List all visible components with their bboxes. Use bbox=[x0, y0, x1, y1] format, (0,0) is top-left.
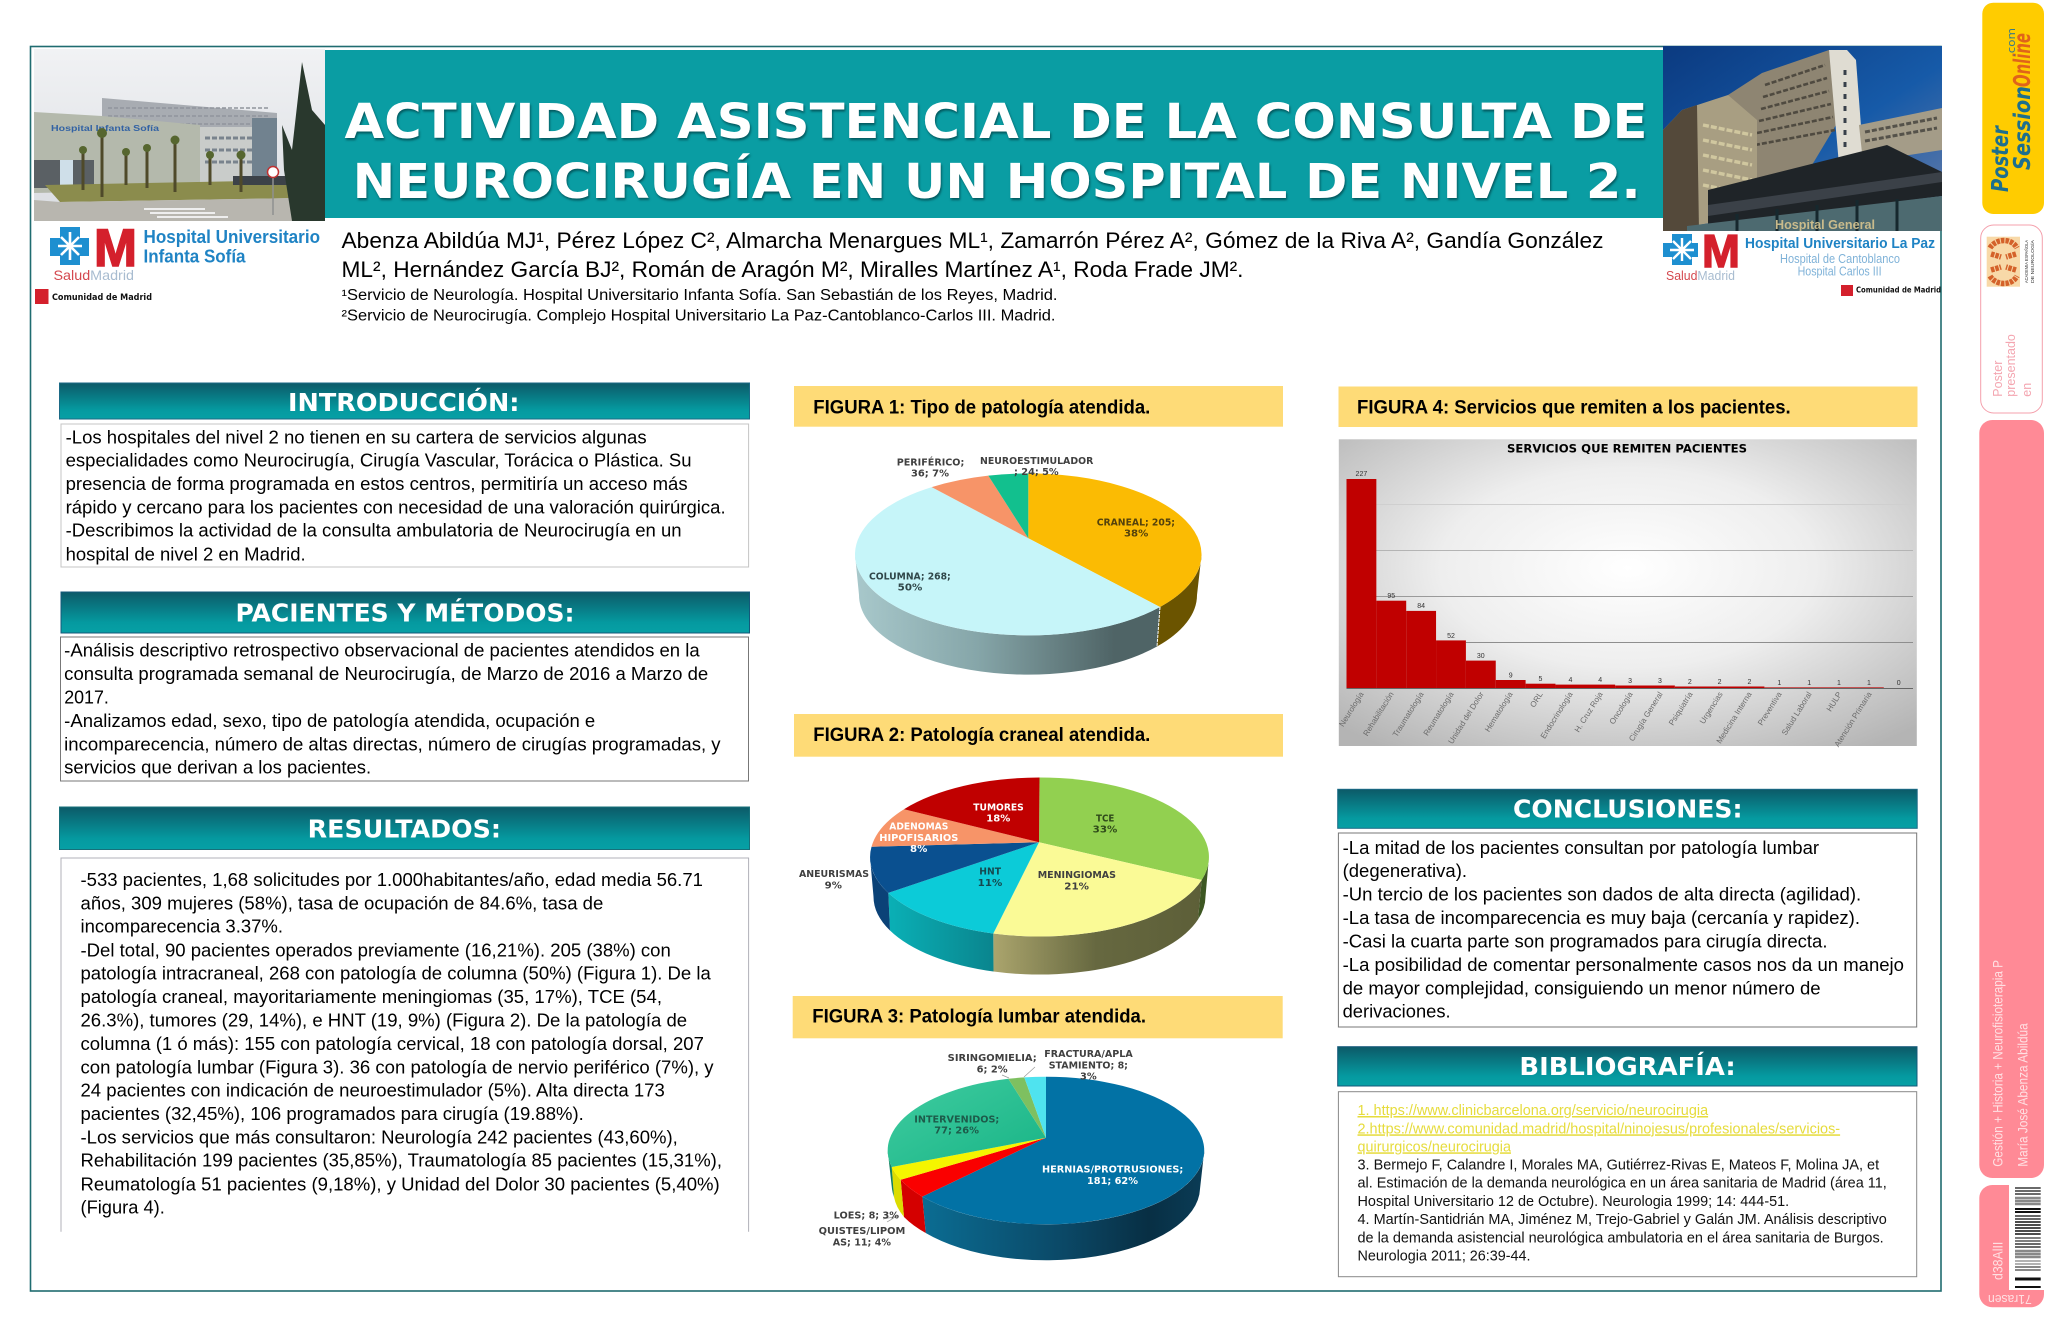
photo: Hospital Universitario La Paz: Hospital General bbox=[1775, 217, 1875, 232]
heading: conclusiones: CONCLUSIONES: bbox=[1513, 795, 1742, 824]
panel: resultados bbox=[60, 807, 750, 1232]
text block: introducción: presencia de forma programada en estos centros, permitiría un acceso más bbox=[66, 474, 688, 494]
pie chart: patología craneal: TCE bbox=[1096, 814, 1114, 825]
pie chart: patología lumbar: 77; 26% bbox=[934, 1126, 979, 1137]
pie chart: patología lumbar: LOES; 8; 3% bbox=[834, 1210, 899, 1221]
pie chart: patología lumbar: STAMIENTO; 8; bbox=[1049, 1060, 1128, 1071]
sidebar: poster presentado en bbox=[1981, 225, 2042, 413]
sidebar: PosterSessionOnline brand tab: Online bbox=[2010, 33, 2036, 87]
text block: conclusiones: (degenerativa). bbox=[1343, 861, 1467, 881]
pie chart: patología lumbar: 3% bbox=[1080, 1071, 1097, 1082]
authors and affiliations: Abenza Abildúa MJ¹, Pérez López C², Almarcha Menargues ML¹, Zamarrón Pérez A², Gómez de la Riva A², Gandía González bbox=[342, 228, 1604, 253]
photo: Hospital Infanta Sofía: Hospital Infanta Sofía bbox=[51, 123, 159, 133]
heading: pacientes y métodos bbox=[61, 592, 750, 633]
pie chart: tipo de patología: 50% bbox=[898, 583, 923, 594]
authors and affiliations: ML², Hernández García BJ², Román de Aragón M², Miralles Martínez A¹, Roda Frade JM². bbox=[342, 257, 1244, 282]
text block: resultados: patología intracraneal, 268 con patología de columna (50%) (Figura 1). De la bbox=[80, 964, 712, 984]
text block: bibliografía: 2.https://www.comunidad.madrid/hospital/ninojesus/profesionales/servicios- bbox=[1358, 1120, 1840, 1137]
sidebar: barcode tab: 71rasen bbox=[1988, 1292, 2032, 1307]
icon: brain logo: ACADEMIA ESPAÑOLA bbox=[2023, 240, 2029, 283]
icon: brain logo: DE NEUROLOGÍA bbox=[2029, 240, 2035, 283]
sidebar: pink tab with session and author: Gestión + Historia + Neurofisioterapia P bbox=[1990, 960, 2006, 1167]
bar chart: servicios que remiten pacientes: Salud Laboral bbox=[1780, 690, 1814, 737]
heading: figura 1: FIGURA 1: Tipo de patología atendida. bbox=[813, 397, 1150, 418]
logo: Hospital Universitario La Paz: Hospital de Cantoblanco bbox=[1780, 252, 1900, 266]
heading: conclusiones bbox=[1338, 789, 1917, 828]
bar chart: servicios que remiten pacientes: 3 bbox=[1658, 678, 1662, 685]
text block: resultados: pacientes (32,45%), 106 programados para cirugía (19.88%). bbox=[80, 1104, 584, 1124]
bar chart: servicios que remiten pacientes: 227 bbox=[1356, 471, 1367, 478]
pie chart: patología lumbar: QUISTES/LIPOM bbox=[819, 1226, 905, 1237]
bar chart: servicios que remiten pacientes: 2 bbox=[1748, 679, 1752, 686]
panel: figura 1 bbox=[794, 386, 1283, 675]
bar chart: servicios que remiten pacientes: 9 bbox=[1509, 672, 1513, 680]
text block: pacientes y métodos: servicios que derivan a los pacientes. bbox=[64, 758, 371, 778]
sidebar: pink tab with session and author: María José Abenza Abildúa bbox=[2014, 1023, 2030, 1167]
pie chart: tipo de patología: PERIFÉRICO; bbox=[897, 455, 964, 468]
pie chart: patología craneal: 18% bbox=[986, 814, 1011, 825]
pie chart: patología craneal: 11% bbox=[978, 878, 1003, 889]
bar chart: servicios que remiten pacientes: 95 bbox=[1387, 593, 1395, 600]
text block: resultados: -533 pacientes, 1,68 solicitudes por 1.000habitantes/año, edad media 56.71 bbox=[80, 870, 703, 890]
text block: resultados: Reumatología 51 pacientes (9,18%), y Unidad del Dolor 30 pacientes (5,40%) bbox=[80, 1174, 720, 1194]
pie chart: patología craneal: 8% bbox=[910, 844, 928, 855]
logo: Hospital Universitario Infanta Sofía: Hospital Universitario bbox=[144, 227, 320, 247]
text block: pacientes y métodos: 2017. bbox=[64, 687, 109, 707]
panel: introducción bbox=[60, 383, 750, 567]
logo: Hospital Universitario La Paz: Comunidad de Madrid bbox=[1856, 286, 1941, 295]
bar chart: servicios que remiten pacientes: SERVICIOS QUE REMITEN PACIENTES bbox=[1507, 442, 1747, 456]
pie chart: patología craneal: ADENOMAS bbox=[889, 822, 948, 833]
bar chart: servicios que remiten pacientes: 52 bbox=[1447, 633, 1455, 640]
sidebar: poster presentado en: presentado bbox=[2004, 334, 2018, 397]
sidebar: barcode tab: d38AlII bbox=[1990, 1242, 2006, 1280]
logo: Hospital Universitario Infanta Sofía: SaludMadrid bbox=[54, 267, 134, 283]
heading: pacientes y métodos: PACIENTES Y MÉTODOS: bbox=[236, 599, 574, 628]
text block: pacientes y métodos: -Análisis descriptivo retrospectivo observacional de pacientes atendidos en la bbox=[64, 641, 701, 661]
text block: introducción: hospital de nivel 2 en Madrid. bbox=[66, 544, 306, 564]
pie chart: tipo de patología: 36; 7% bbox=[911, 469, 949, 480]
text block: resultados: incomparecencia 3.37%. bbox=[80, 917, 283, 937]
text block: resultados: columna (1 ó más): 155 con patología cervical, 18 con patología dorsal, 207 bbox=[80, 1034, 704, 1054]
text block: introducción: -Describimos la actividad de la consulta ambulatoria de Neurocirugía en un bbox=[66, 521, 682, 541]
bar chart: servicios que remiten pacientes: Oncología bbox=[1608, 690, 1635, 726]
sidebar: PosterSessionOnline brand tab: Poster bbox=[1988, 125, 2014, 192]
text block: conclusiones: -La posibilidad de comentar personalmente casos nos da un manejo bbox=[1343, 955, 1904, 975]
text block: bibliografía: quirurgicos/neurocirugia bbox=[1358, 1138, 1512, 1155]
pie chart: patología craneal: MENINGIOMAS bbox=[1038, 870, 1116, 881]
heading: figura 2 bbox=[794, 714, 1283, 757]
text block: bibliografía: de la demanda asistencial neurológica ambulatoria en el área sanitaria de Burgos. bbox=[1358, 1229, 1884, 1246]
bar chart: servicios que remiten pacientes: Endocrinología bbox=[1539, 690, 1575, 740]
icon: blue star cross bbox=[50, 227, 89, 265]
pie chart: patología craneal: HIPOFISARIOS bbox=[879, 833, 958, 844]
pie chart: patología craneal bbox=[799, 777, 1209, 975]
text block: introducción bbox=[61, 424, 749, 567]
pie chart: tipo de patología bbox=[855, 455, 1202, 675]
pie chart: patología lumbar: 181; 62% bbox=[1087, 1176, 1138, 1187]
bar chart: servicios que remiten pacientes: 1 bbox=[1807, 680, 1811, 687]
sidebar: PosterSessionOnline brand tab: Session bbox=[2010, 86, 2036, 170]
text block: resultados: Rehabilitación 199 pacientes (35,85%), Traumatología 85 pacientes (15,31%), bbox=[80, 1151, 722, 1171]
text block: resultados: -Los servicios que más consultaron: Neurología 242 pacientes (43,60%), bbox=[80, 1127, 678, 1147]
text block: bibliografía bbox=[1338, 1092, 1917, 1277]
text block: resultados: patología craneal, mayoritariamente meningiomas (35, 17%), TCE (54, bbox=[80, 987, 662, 1007]
title banner: ACTIVIDAD ASISTENCIAL DE LA CONSULTA DE bbox=[344, 94, 1648, 150]
title banner bbox=[325, 50, 1663, 218]
panel: figura 4 bbox=[1337, 386, 1918, 749]
pie chart: patología lumbar: FRACTURA/APLA bbox=[1044, 1049, 1133, 1060]
bar chart: servicios que remiten pacientes: Medicina Interna bbox=[1715, 690, 1754, 745]
text block: conclusiones: -Un tercio de los pacientes son dados de alta directa (agilidad). bbox=[1343, 884, 1861, 904]
bar chart: servicios que remiten pacientes: 1 bbox=[1777, 680, 1781, 687]
text block: bibliografía: 3. Bermejo F, Calandre I, Morales MA, Gutiérrez-Rivas E, Mateos F, Molina JA, et bbox=[1358, 1157, 1880, 1174]
title banner: NEUROCIRUGÍA EN UN HOSPITAL DE NIVEL 2. bbox=[353, 153, 1641, 210]
text block: bibliografía: Neurologia 2011; 26:39-44. bbox=[1358, 1248, 1530, 1265]
panel: pacientes y métodos bbox=[60, 592, 750, 781]
text block: resultados: años, 309 mujeres (58%), tasa de ocupación de 84.6%, tasa de bbox=[80, 893, 603, 913]
bar chart: servicios que remiten pacientes: 2 bbox=[1688, 679, 1692, 686]
heading: introducción bbox=[60, 383, 750, 419]
pie chart: tipo de patología: COLUMNA; 268; bbox=[869, 571, 951, 582]
bar chart: servicios que remiten pacientes: 84 bbox=[1417, 603, 1425, 610]
pie chart: patología lumbar: SIRINGOMIELIA; bbox=[948, 1053, 1037, 1064]
pie chart: tipo de patología: CRANEAL; 205; bbox=[1097, 517, 1175, 528]
heading: introducción: INTRODUCCIÓN: bbox=[288, 387, 520, 417]
bar chart: servicios que remiten pacientes: 0 bbox=[1897, 680, 1901, 687]
logo: Hospital Universitario La Paz bbox=[1663, 225, 1941, 296]
authors and affiliations: ²Servicio de Neurocirugía. Complejo Hospital Universitario La Paz-Cantoblanco-Carlos III. Madrid. bbox=[342, 308, 1056, 324]
text block: conclusiones bbox=[1338, 833, 1917, 1027]
pie chart: patología craneal: ANEURISMAS bbox=[799, 869, 869, 880]
sidebar: barcode tab bbox=[1979, 1184, 2044, 1307]
heading: figura 3: FIGURA 3: Patología lumbar atendida. bbox=[812, 1006, 1146, 1027]
pie chart: patología craneal: TUMORES bbox=[973, 803, 1024, 814]
logo: Hospital Universitario La Paz: Hospital Universitario La Paz bbox=[1745, 235, 1935, 252]
heading: figura 1 bbox=[794, 386, 1283, 427]
sidebar: poster presentado en: en bbox=[2020, 383, 2034, 397]
pie chart: tipo de patología: 38% bbox=[1124, 529, 1149, 540]
text block: introducción: rápido y cercano para los pacientes con necesidad de una valoración quirúrgica. bbox=[66, 497, 726, 517]
pie chart: patología craneal: 9% bbox=[825, 880, 842, 891]
bar chart: servicios que remiten pacientes: 5 bbox=[1539, 676, 1543, 683]
pie chart: tipo de patología: ; 24; 5% bbox=[1014, 467, 1059, 478]
logo: Hospital Universitario Infanta Sofía bbox=[35, 219, 320, 304]
text block: conclusiones: -La tasa de incomparecencia es muy baja (cercanía y rapidez). bbox=[1343, 908, 1860, 928]
bar chart: servicios que remiten pacientes: 1 bbox=[1837, 680, 1841, 687]
bar chart: servicios que remiten pacientes: 1 bbox=[1867, 680, 1871, 687]
bar chart: servicios que remiten pacientes: Unidad del Dolor bbox=[1446, 690, 1486, 746]
icon: blue star cross bbox=[1663, 234, 1698, 265]
pie chart: tipo de patología: NEUROESTIMULADOR bbox=[980, 456, 1094, 467]
text block: introducción: especialidades como Neurocirugía, Cirugía Vascular, Torácica o Plástica. Su bbox=[66, 451, 692, 471]
text block: conclusiones: -La mitad de los pacientes consultan por patología lumbar bbox=[1343, 838, 1819, 858]
bar chart: servicios que remiten pacientes: 4 bbox=[1568, 677, 1572, 684]
text block: bibliografía: Hospital Universitario 12 de Octubre). Neurologia 1999; 14: 444-51. bbox=[1358, 1193, 1789, 1210]
bar chart: servicios que remiten pacientes: Urgencias bbox=[1698, 690, 1725, 726]
authors and affiliations bbox=[342, 228, 1604, 324]
bar chart: servicios que remiten pacientes: 30 bbox=[1477, 653, 1485, 660]
text block: pacientes y métodos: consulta programada semanal de Neurocirugía, de Marzo de 2016 a Marzo de bbox=[64, 664, 708, 684]
text block: resultados: con patología lumbar (Figura 3). 36 con patología de nervio periférico (7%), y bbox=[80, 1057, 714, 1077]
pie chart: patología lumbar: 6; 2% bbox=[977, 1064, 1008, 1075]
logo: Hospital Universitario La Paz: M bbox=[1702, 225, 1740, 277]
heading: figura 2: FIGURA 2: Patología craneal atendida. bbox=[813, 725, 1150, 746]
bar chart: servicios que remiten pacientes: 2 bbox=[1718, 679, 1722, 686]
bar chart: servicios que remiten pacientes: Cirugía General bbox=[1627, 690, 1665, 743]
text block: conclusiones: de mayor complejidad, consiguiendo un menor número de bbox=[1343, 978, 1821, 998]
bar chart: servicios que remiten pacientes: HULP bbox=[1825, 690, 1844, 713]
sidebar: pink tab with session and author bbox=[1979, 420, 2044, 1178]
heading: bibliografía: BIBLIOGRAFÍA: bbox=[1519, 1052, 1736, 1081]
bar chart: servicios que remiten pacientes: H. Cruz Roja bbox=[1573, 690, 1605, 734]
bar chart: servicios que remiten pacientes: Neurología bbox=[1337, 690, 1366, 728]
logo: Hospital Universitario La Paz: SaludMadrid bbox=[1666, 269, 1735, 283]
bar chart: servicios que remiten pacientes: 4 bbox=[1598, 677, 1602, 684]
text block: introducción: -Los hospitales del nivel 2 no tienen en su cartera de servicios algunas bbox=[66, 427, 647, 447]
heading: figura 4 bbox=[1338, 386, 1918, 427]
pie chart: patología lumbar bbox=[819, 1049, 1204, 1260]
panel: conclusiones bbox=[1338, 789, 1917, 1027]
text block: resultados: 26.3%), tumores (29, 14%), e HNT (19, 9%) (Figura 2). De la patología de bbox=[80, 1010, 687, 1030]
text block: bibliografía: 1. https://www.clinicbarcelona.org/servicio/neurocirugia bbox=[1358, 1102, 1709, 1119]
bar chart: servicios que remiten pacientes: Psiquiatría bbox=[1667, 690, 1695, 727]
bar chart: servicios que remiten pacientes: 3 bbox=[1628, 678, 1632, 685]
sidebar: poster presentado en: Poster bbox=[1991, 361, 2005, 397]
text block: bibliografía: 4. Martín-Santidrián MA, Jiménez M, Trejo-Gabriel y Galán JM. Análisis descriptivo bbox=[1358, 1211, 1887, 1228]
text block: resultados: (Figura 4). bbox=[80, 1198, 165, 1218]
bar chart: servicios que remiten pacientes: ORL bbox=[1528, 690, 1545, 709]
authors and affiliations: ¹Servicio de Neurología. Hospital Universitario Infanta Sofía. San Sebastián de los Reyes, Madrid. bbox=[342, 287, 1058, 304]
logo: Hospital Universitario Infanta Sofía: Infanta Sofía bbox=[144, 246, 246, 266]
sidebar: PosterSessionOnline brand tab bbox=[1982, 3, 2044, 214]
panel: figura 3 bbox=[793, 996, 1283, 1260]
bar chart: servicios que remiten pacientes: Reumatología bbox=[1422, 690, 1456, 737]
logo: Hospital Universitario Infanta Sofía: Comunidad de Madrid bbox=[52, 293, 152, 303]
pie chart: patología lumbar: AS; 11; 4% bbox=[833, 1237, 891, 1248]
text block: pacientes y métodos: -Analizamos edad, sexo, tipo de patología atendida, ocupación e bbox=[64, 711, 595, 731]
photo: Hospital Infanta Sofía bbox=[34, 49, 325, 221]
text block: resultados bbox=[61, 858, 749, 1232]
sidebar: PosterSessionOnline brand tab: .com bbox=[2005, 28, 2018, 57]
bar chart: servicios que remiten pacientes: Traumatología bbox=[1391, 690, 1426, 739]
bar chart: servicios que remiten pacientes: Atención Primaria bbox=[1833, 690, 1874, 749]
photo: Hospital Universitario La Paz bbox=[1663, 46, 1942, 232]
pie chart: patología lumbar: HERNIAS/PROTRUSIONES; bbox=[1042, 1165, 1183, 1176]
logo: Hospital Universitario La Paz: Hospital Carlos III bbox=[1798, 265, 1882, 279]
icon: brain logo bbox=[1987, 237, 2035, 287]
heading: resultados bbox=[60, 807, 750, 850]
bar chart: servicios que remiten pacientes bbox=[1337, 439, 1917, 749]
pie chart: patología craneal: 21% bbox=[1064, 881, 1089, 892]
pie chart: patología lumbar: INTERVENIDOS; bbox=[914, 1114, 999, 1125]
text block: conclusiones: derivaciones. bbox=[1343, 1002, 1451, 1022]
text block: resultados: -Del total, 90 pacientes operados previamente (16,21%). 205 (38%) con bbox=[80, 940, 671, 960]
panel: figura 2 bbox=[794, 714, 1283, 975]
heading: figura 3 bbox=[793, 996, 1283, 1038]
pie chart: patología craneal: HNT bbox=[979, 867, 1001, 878]
text block: pacientes y métodos: incomparecencia, número de altas directas, número de cirugías programadas, y bbox=[64, 734, 721, 754]
heading: bibliografía bbox=[1338, 1047, 1917, 1086]
bar chart: servicios que remiten pacientes: Rehabilitación bbox=[1361, 690, 1396, 738]
bar chart: servicios que remiten pacientes: Preventiva bbox=[1756, 690, 1784, 727]
heading: figura 4: FIGURA 4: Servicios que remiten a los pacientes. bbox=[1357, 398, 1791, 418]
text block: conclusiones: -Casi la cuarta parte son programados para cirugía directa. bbox=[1343, 931, 1828, 951]
bar chart: servicios que remiten pacientes: Hematología bbox=[1483, 690, 1515, 734]
pie chart: patología craneal: 33% bbox=[1093, 825, 1118, 836]
panel: bibliografía bbox=[1338, 1047, 1917, 1277]
barcode bbox=[2015, 1188, 2041, 1287]
heading: resultados: RESULTADOS: bbox=[308, 814, 501, 843]
text block: pacientes y métodos bbox=[60, 637, 748, 781]
text block: resultados: 24 pacientes con indicación de neuroestimulador (5%). Alta directa 173 bbox=[80, 1081, 665, 1101]
text block: bibliografía: al. Estimación de la demanda neurológica en un área sanitaria de Madrid (área 11, bbox=[1358, 1175, 1887, 1192]
logo: Hospital Universitario Infanta Sofía: M bbox=[94, 219, 137, 278]
